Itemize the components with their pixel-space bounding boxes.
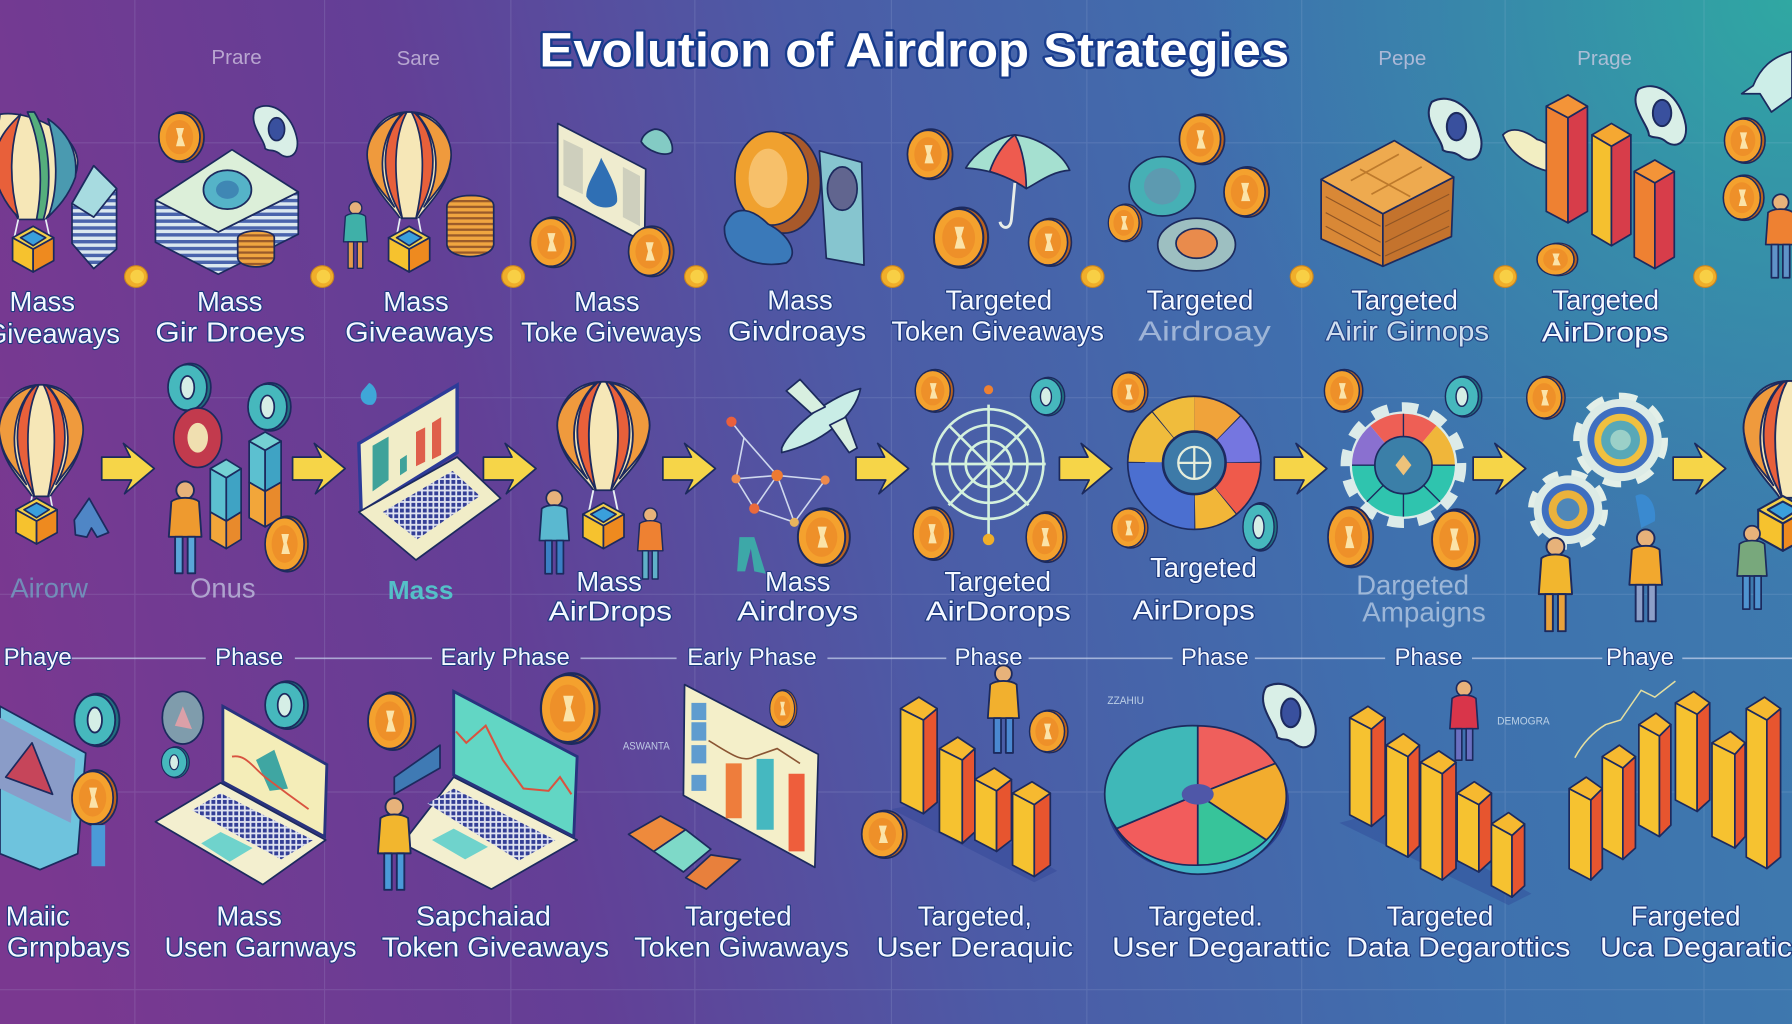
icon: laptop with chart (359, 383, 501, 560)
row 3: labels: Maiic (6, 901, 70, 932)
row 1: icons (0, 51, 1792, 278)
icon: document with droplet (530, 123, 674, 277)
top phase labels: Sare (397, 47, 440, 70)
icon: wooden crate (1321, 99, 1481, 266)
row 3: labels: Fargeted (1631, 901, 1741, 932)
icon: tokens (1108, 114, 1269, 271)
row 1: labels: Gir Droeys (155, 317, 305, 348)
row 3: labels: User Degarattic (1112, 932, 1330, 963)
row 2: labels: AirDorops (926, 596, 1071, 627)
icon: dashboard board with tiles (623, 685, 907, 889)
icon: umbrella and coins (907, 129, 1071, 268)
timeline dots (125, 266, 1717, 287)
row 2: labels: Ampaigns (1362, 597, 1486, 628)
icon: bar chart with cloud (1503, 86, 1686, 276)
row 1: labels: Targeted (946, 285, 1052, 316)
phase timeline: Early Phase (687, 644, 817, 671)
row 1: labels: Airir Girnops (1326, 316, 1489, 347)
row 3: labels: Mass (216, 901, 282, 932)
row 1: labels: Token Giveaways (891, 316, 1104, 347)
phase timeline: Phase (1395, 644, 1463, 671)
icon: balloon with person and coins (344, 112, 494, 272)
icon: tokens, person and bars (168, 363, 308, 573)
icon: laptop with yellow screen (155, 681, 327, 885)
icon: descending bars with person: DEMOGRA (1497, 716, 1550, 728)
row 2: labels: Dargeted (1356, 569, 1469, 600)
row 3: labels: Token Giwaways (634, 932, 849, 963)
row 2: labels: Targeted (944, 566, 1051, 597)
row 3: labels: Uca Degaratic (1600, 932, 1792, 963)
icon: token stack (155, 106, 298, 274)
icon: donut chart (1112, 372, 1277, 551)
row 2: labels: Mass (388, 575, 453, 605)
row 1: labels: AirDrops (1542, 317, 1669, 348)
icon: radar target (913, 369, 1067, 562)
row 3: labels: Sapchaiad (416, 901, 551, 932)
icon: balloon with people (539, 382, 663, 579)
row 3: icons (0, 665, 1781, 905)
phase timeline: Phase (955, 644, 1023, 671)
icon: gear wheel chart (1324, 369, 1482, 570)
row 1: labels: Mass (574, 286, 640, 317)
icon: descending bars with person (1339, 681, 1550, 905)
row 3: labels: Targeted, (918, 901, 1032, 932)
row 2: labels: AirDrops (1133, 594, 1255, 625)
row 3: labels: Grnpbays (7, 932, 130, 963)
phase timeline (4, 644, 1792, 671)
row 3: labels: Targeted. (1149, 901, 1263, 932)
phase timeline: Phaye (1606, 644, 1674, 671)
row 2: labels: Airorw (10, 573, 88, 604)
row 1: labels: Mass (383, 286, 449, 317)
title: Evolution of Airdrop Strategies (539, 24, 1289, 77)
icon: balloon with stack (0, 112, 117, 272)
icon: growth bars and trend line (1569, 681, 1781, 880)
row 1: labels (0, 285, 1669, 349)
row 2: icons (0, 363, 1792, 631)
row 2: labels: AirDrops (549, 596, 672, 627)
row 2: labels: Mass (576, 566, 642, 597)
row 2: labels: Onus (190, 573, 256, 604)
icon: dashboard board with tiles: ASWANTA (623, 741, 670, 753)
icon: big coin and device (724, 131, 864, 265)
icon: pie chart: ZZAHIU (1107, 695, 1144, 707)
icon: bars with person and coin (891, 665, 1068, 882)
row 3: labels: Token Giveaways (382, 932, 609, 963)
row 3: labels: Usen Garnways (165, 932, 357, 963)
phase timeline: Phase (215, 644, 283, 671)
row 1: labels: Mass (10, 286, 75, 317)
row 1: labels: Airdroay (1138, 316, 1271, 347)
row 3: labels: Data Degarottics (1346, 932, 1570, 963)
row 1: labels: Giveaways (345, 317, 494, 348)
top phase labels: Pepe (1378, 47, 1426, 70)
process arrows (102, 443, 1726, 494)
phase timeline: Phase (1181, 644, 1249, 671)
row 2: labels (10, 552, 1486, 628)
row 1: labels: Targeted (1552, 285, 1659, 316)
row 1: labels: Mass (767, 285, 833, 316)
row 1: labels: Targeted (1147, 285, 1253, 316)
phase timeline: Phaye (4, 644, 72, 671)
icon: balloon and jacket (0, 385, 109, 544)
row 2: labels: Airdroys (737, 596, 858, 627)
row 1: labels: Toke Giveways (521, 317, 702, 348)
row 2: labels: Mass (765, 566, 830, 597)
row 1: labels: Givdroays (728, 316, 866, 347)
icon: gears with people (1527, 376, 1662, 631)
row 1: labels: Targeted (1351, 285, 1458, 316)
row 2: labels: Targeted (1150, 552, 1257, 583)
row 1: labels: Mass (197, 286, 262, 317)
icon: data panel and coins (0, 694, 119, 870)
row 3: labels: Targeted (685, 901, 792, 932)
row 3: labels (6, 901, 1792, 963)
icon: balloon and person (1737, 381, 1792, 609)
row 3: labels: Targeted (1387, 901, 1493, 932)
top phase labels: Prare (211, 46, 262, 69)
icon: rocket and coins (1723, 51, 1792, 278)
row 3: labels: User Deraquic (877, 932, 1073, 963)
icon: laptop with teal screen and person (368, 673, 600, 890)
icon: plane with network (726, 379, 861, 574)
phase timeline: Early Phase (440, 644, 570, 671)
top phase labels (211, 46, 1632, 70)
icon: pie chart (1105, 684, 1316, 874)
top phase labels: Prage (1577, 47, 1632, 70)
